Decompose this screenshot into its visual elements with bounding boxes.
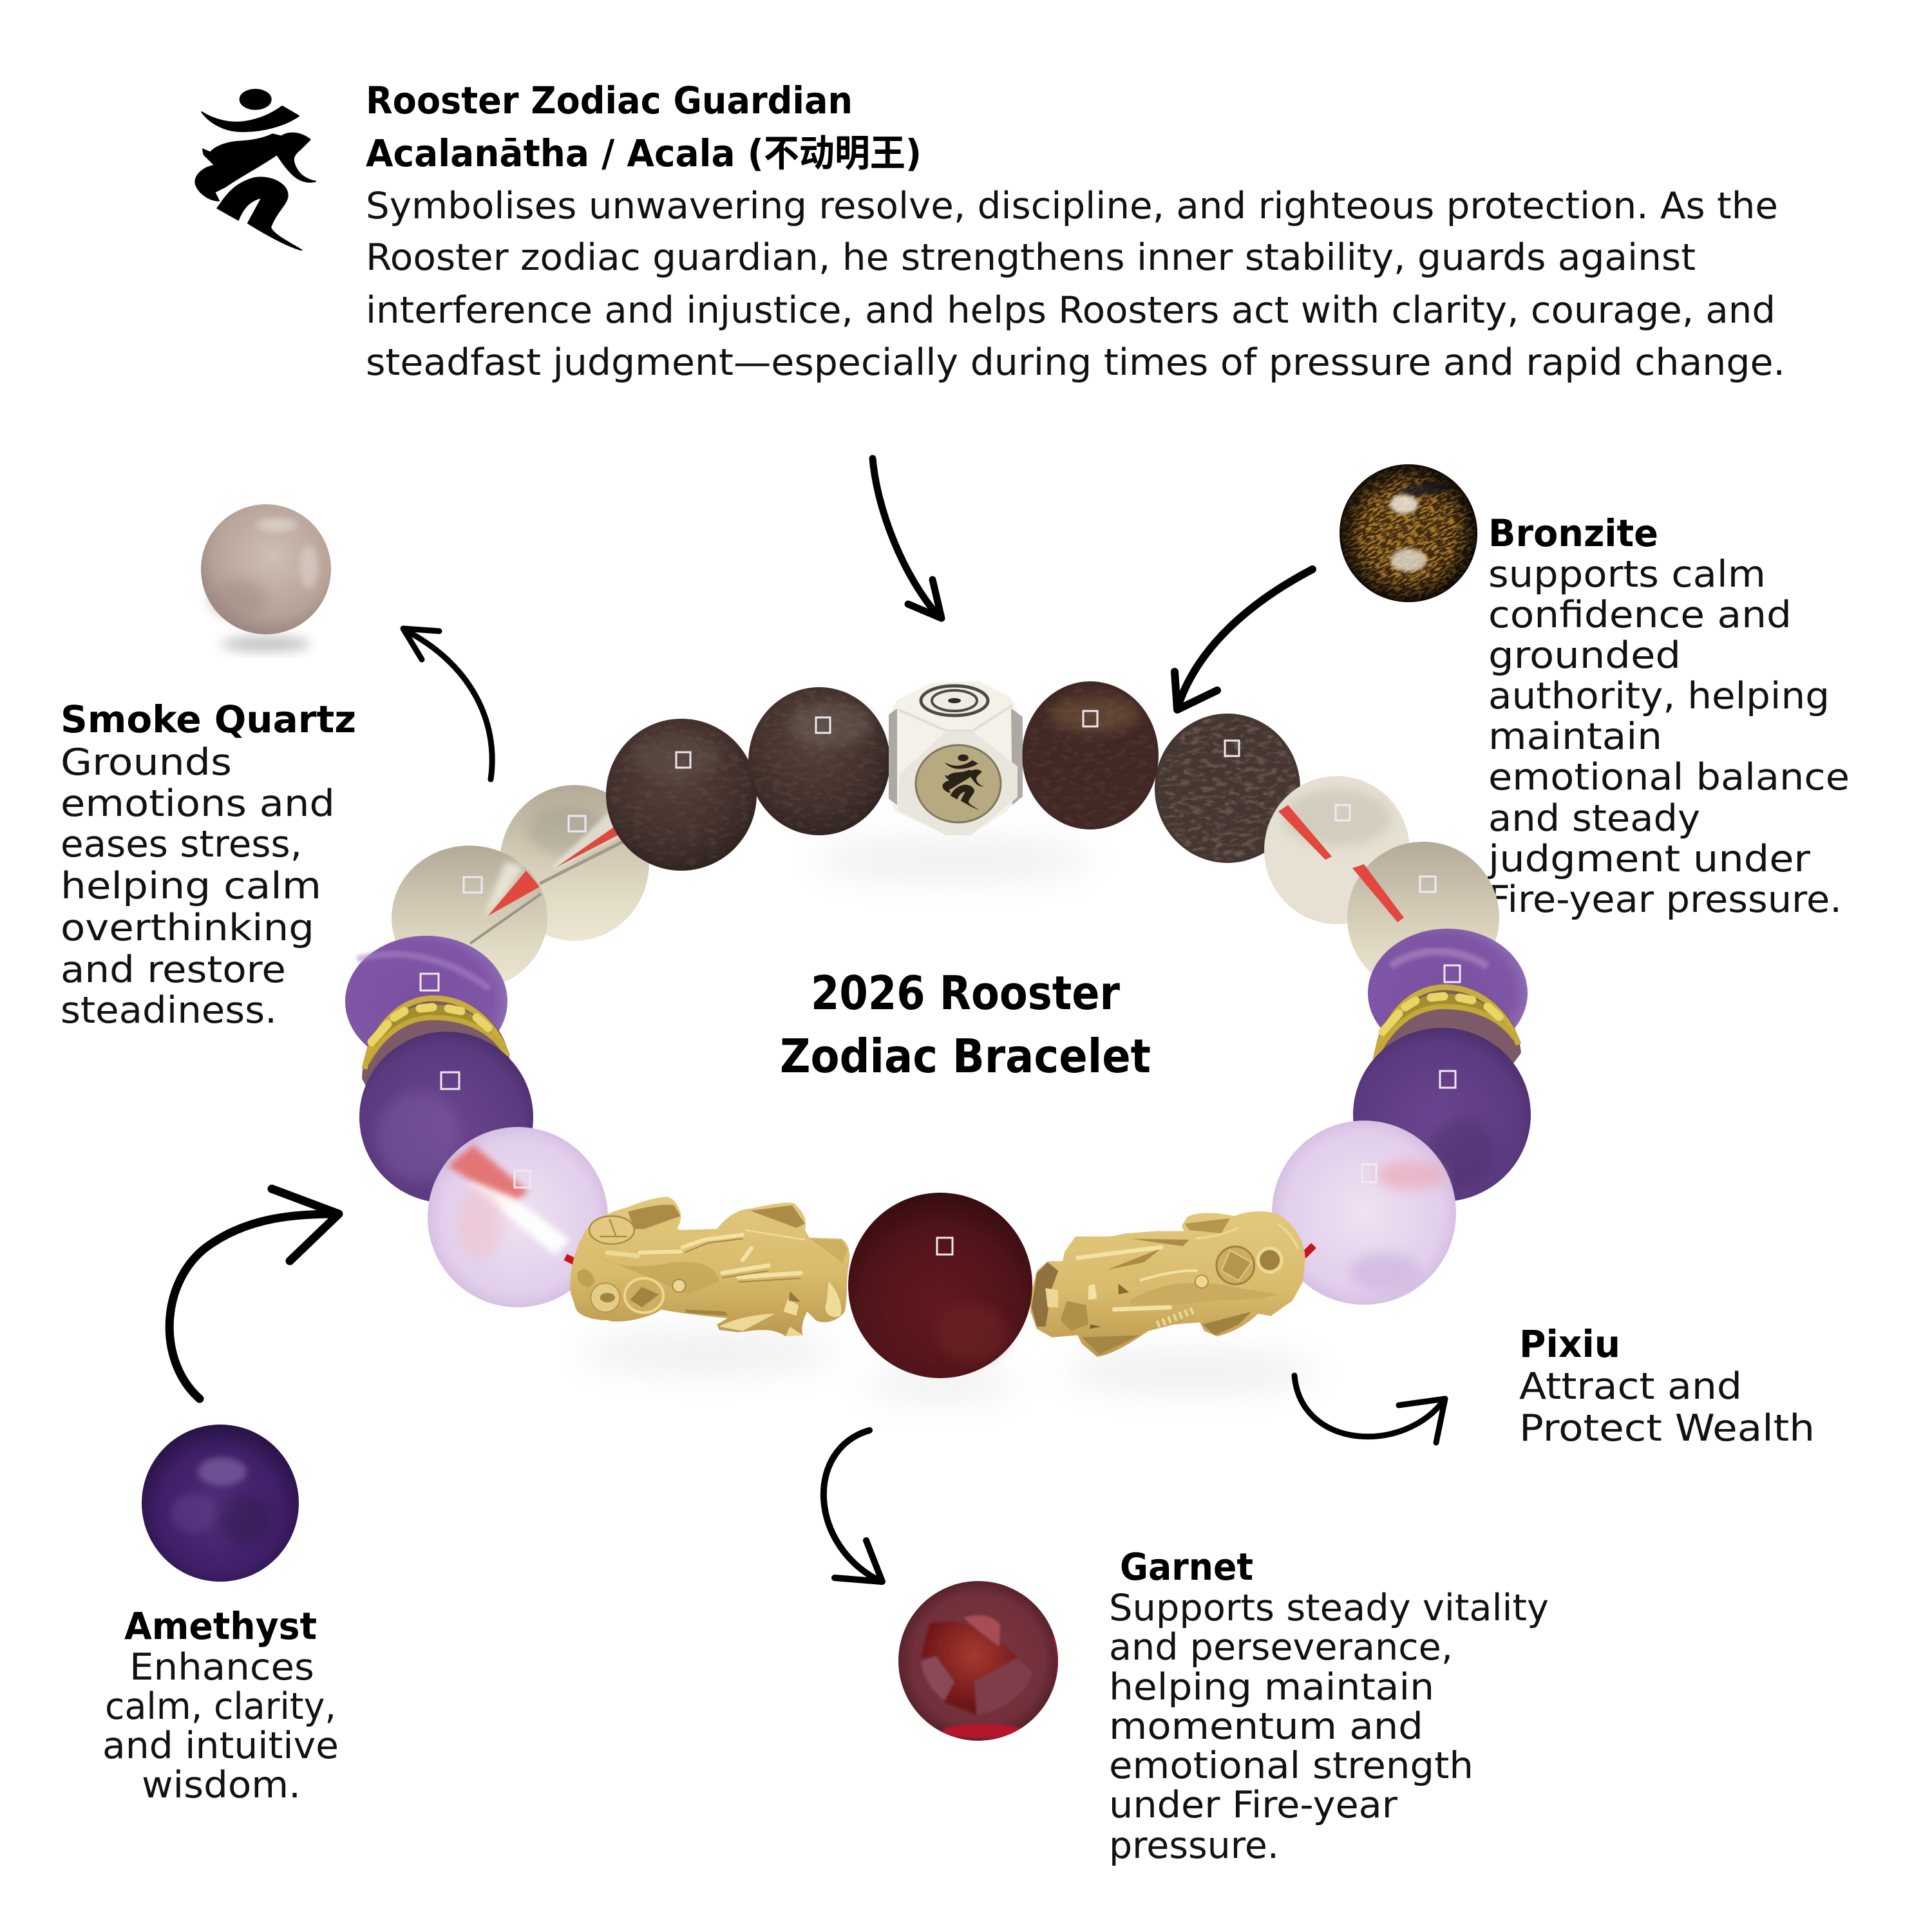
text: Smoke Quartz: helping calm: [61, 865, 321, 907]
center title: Zodiac Bracelet: [780, 1029, 1151, 1083]
text: Bronzite: Fire-year pressure.: [1488, 878, 1842, 921]
heading and description: Rooster Zodiac Guardian: interference and injustice, and helps Roosters act with clarity, courage, and: [366, 289, 1776, 332]
thread: [565, 1245, 1314, 1264]
text: Garnet: Garnet: [1120, 1545, 1253, 1589]
text: Bronzite: judgment under: [1487, 838, 1811, 880]
text: Garnet: Supports steady vitality: [1109, 1587, 1549, 1629]
arrow: Smoke Quartz: [403, 629, 492, 779]
arrow: guardian to bracelet charm: [873, 459, 942, 618]
text: Bronzite: confidence and: [1488, 594, 1792, 636]
arrow: Bronzite: [1175, 569, 1312, 710]
text: Smoke Quartz: emotions and: [61, 782, 335, 825]
text: Pixiu: Pixiu: [1519, 1322, 1620, 1366]
text: Smoke Quartz: overthinking: [61, 907, 314, 949]
text: Smoke Quartz: Grounds: [61, 741, 232, 784]
bead: pale amethyst right: [1272, 1121, 1456, 1305]
center title: [780, 966, 1151, 1083]
text: Amethyst: wisdom.: [142, 1764, 301, 1806]
spacer: gold ring left: [362, 996, 510, 1088]
text: Amethyst: Amethyst: [124, 1604, 317, 1648]
heading and description: Rooster Zodiac Guardian: Acalanātha / Acala (不动明王): [366, 131, 922, 175]
text: Amethyst: [102, 1604, 339, 1806]
bead: amethyst dark left: [359, 1032, 533, 1203]
text: Bronzite: maintain: [1488, 715, 1662, 758]
text: Amethyst: calm, clarity,: [105, 1685, 336, 1728]
bead: amethyst upper left: [345, 936, 507, 1067]
bead: pale amethyst left: [428, 1127, 608, 1307]
heading and description: Rooster Zodiac Guardian: Symbolises unwavering resolve, discipline, and righteous protection. As the: [366, 185, 1778, 227]
bead: smoke quartz front left: [392, 846, 547, 990]
bracelet: [345, 681, 1531, 1399]
text: Garnet: under Fire-year: [1109, 1784, 1398, 1826]
text: Amethyst: and intuitive: [102, 1725, 339, 1767]
heading and description: Rooster Zodiac Guardian: Rooster zodiac guardian, he strengthens inner stability, guards against: [366, 236, 1696, 279]
bead: amethyst upper right: [1368, 929, 1528, 1057]
spacer: gold ring right: [1373, 985, 1521, 1079]
text: Garnet: momentum and: [1109, 1705, 1423, 1748]
text: Smoke Quartz: eases stress,: [61, 823, 302, 866]
text: Smoke Quartz: steadiness.: [61, 989, 277, 1032]
bead: garnet center: [848, 1193, 1032, 1378]
text: Pixiu: Protect Wealth: [1519, 1407, 1815, 1450]
text: Smoke Quartz: and restore: [61, 949, 286, 991]
text: Garnet: emotional strength: [1109, 1745, 1473, 1787]
text: Bronzite: authority, helping: [1488, 675, 1830, 717]
text: Smoke Quartz: Smoke Quartz: [61, 697, 356, 741]
bead: amethyst dark right: [1353, 1028, 1531, 1202]
icon: Acala seed syllable: [195, 90, 316, 250]
text: Garnet: [1109, 1545, 1549, 1867]
text: Amethyst: Enhances: [129, 1646, 314, 1689]
charm: gold pixiu left: [570, 1197, 849, 1336]
arrow: Garnet: [824, 1430, 882, 1582]
bead: smoke quartz front right: [1347, 842, 1499, 994]
bead: smoke quartz back left: [500, 785, 649, 941]
bead: silver cube charm: [889, 681, 1023, 835]
bead: smoke quartz back right: [1264, 776, 1410, 924]
bead: bronzite 4: [1155, 714, 1300, 863]
text: Pixiu: [1519, 1322, 1815, 1450]
text: Bronzite: Bronzite: [1488, 511, 1658, 555]
text: Smoke Quartz: [61, 697, 356, 1032]
heading and description: Rooster Zodiac Guardian: [366, 79, 1785, 384]
bead: bronzite 2: [748, 687, 890, 835]
arrow: Pixiu: [1294, 1376, 1445, 1443]
bead: bronzite 1: [606, 719, 757, 871]
charm: gold pixiu right: [1030, 1211, 1305, 1357]
bead highlights: [421, 711, 1460, 1255]
stone: Garnet: [898, 1581, 1059, 1741]
text: Bronzite: grounded: [1488, 634, 1681, 677]
text: Garnet: helping maintain: [1109, 1666, 1434, 1709]
stone: Smoke Quartz: [201, 504, 331, 652]
stone: Bronzite: [1318, 443, 1499, 623]
center title: 2026 Rooster: [811, 966, 1120, 1020]
text: Garnet: and perseverance,: [1109, 1626, 1453, 1669]
text: Bronzite: and steady: [1488, 797, 1700, 840]
text: Bronzite: [1487, 511, 1850, 921]
text: Bronzite: supports calm: [1488, 553, 1766, 596]
text: Pixiu: Attract and: [1519, 1365, 1742, 1408]
text: Garnet: pressure.: [1109, 1824, 1279, 1867]
heading and description: Rooster Zodiac Guardian: steadfast judgment—especially during times of pressure and rapid change.: [366, 341, 1785, 384]
text: Bronzite: emotional balance: [1488, 756, 1850, 799]
bead: bronzite 3: [1022, 681, 1159, 829]
heading and description: Rooster Zodiac Guardian: Rooster Zodiac Guardian: [366, 79, 853, 122]
arrow: Amethyst: [169, 1189, 339, 1399]
soft shadows under bracelet: [580, 842, 1320, 1399]
stone: Amethyst: [142, 1425, 299, 1582]
